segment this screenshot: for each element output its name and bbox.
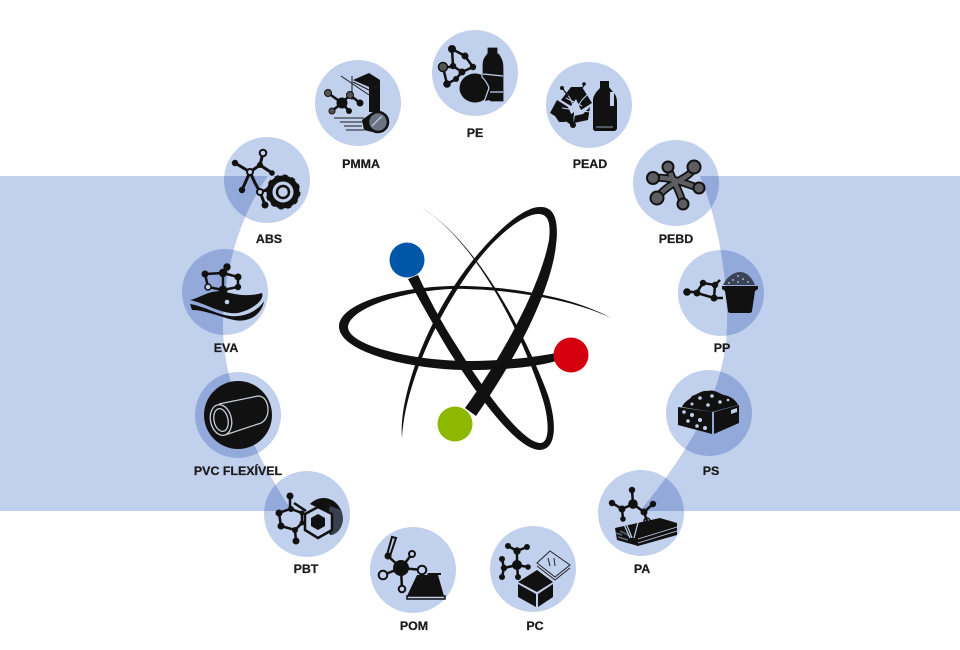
- item: EVA: [182, 249, 268, 355]
- orbit: horizontal: [339, 286, 611, 370]
- item: PP: [678, 250, 764, 355]
- item: PVC FLEXÍVEL: PVC FLEXÍVEL: [194, 463, 282, 478]
- item: EVA: EVA: [214, 341, 238, 355]
- background band: right: [640, 176, 960, 511]
- item: PS: PS: [703, 464, 719, 478]
- item: PBT: [264, 471, 350, 576]
- item: PEAD: PEAD: [573, 157, 607, 171]
- item: ABS: ABS: [256, 232, 282, 246]
- electron: green: [438, 406, 472, 442]
- item: PP: PP: [714, 341, 730, 355]
- item: ABS: [224, 137, 310, 246]
- electron: red: [554, 338, 588, 372]
- item: PBT: PBT: [294, 562, 319, 576]
- item: PEBD: [633, 140, 719, 246]
- item: PS: [666, 370, 752, 478]
- item: PC: PC: [526, 619, 544, 633]
- item: PE: [432, 30, 518, 140]
- item: PA: [598, 470, 684, 576]
- central atom symbol: [339, 207, 611, 450]
- electron: blue: [390, 242, 424, 278]
- item: PVC FLEXÍVEL: [194, 372, 282, 478]
- item: PEAD: [546, 62, 632, 171]
- item: POM: [370, 527, 456, 633]
- item: PE: PE: [467, 126, 483, 140]
- item: PMMA: [315, 60, 401, 171]
- orbit: to green electron: [402, 207, 557, 438]
- orbit: to blue electron: [408, 207, 554, 450]
- item: PMMA: PMMA: [342, 157, 380, 171]
- item: PC: [490, 526, 576, 633]
- background band: left: [0, 176, 292, 511]
- item: POM: POM: [400, 619, 428, 633]
- item: PA: PA: [634, 562, 650, 576]
- item: PEBD: PEBD: [659, 232, 693, 246]
